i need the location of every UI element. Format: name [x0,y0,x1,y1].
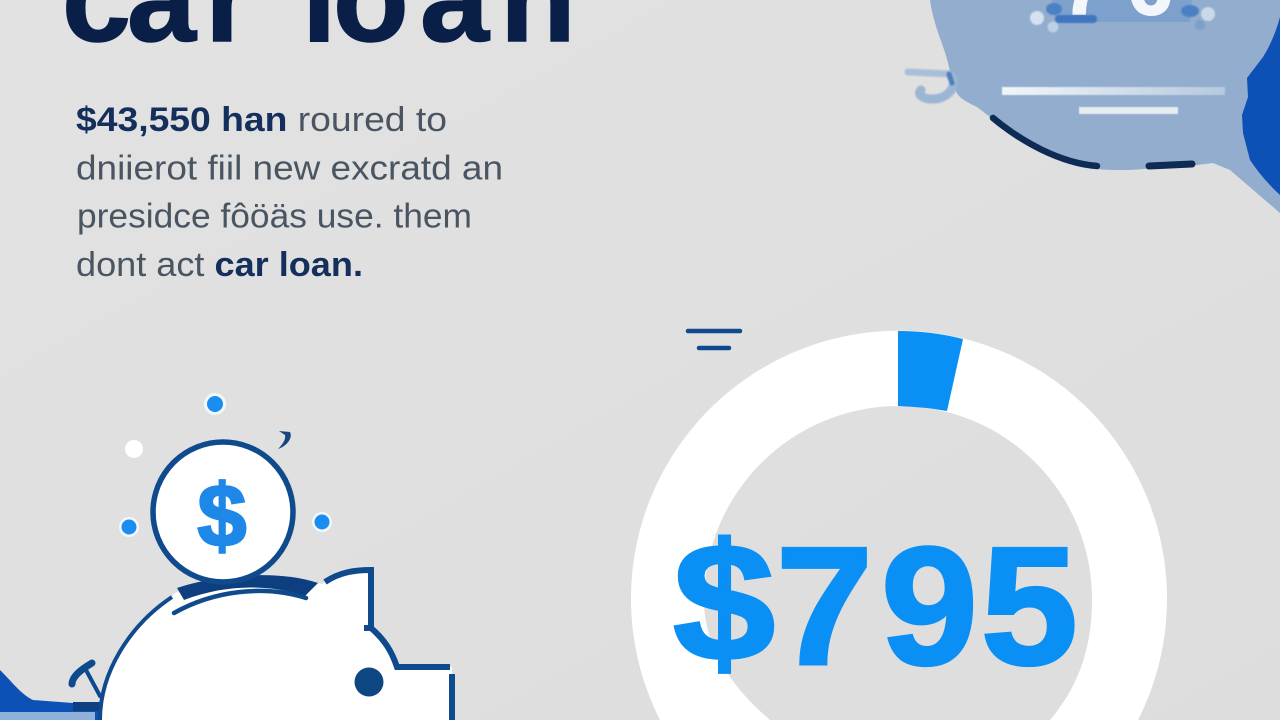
text line 2: dniierot fiil new excratd an [76,150,503,188]
illustration: top right badge [908,0,1280,213]
dark arc segments [993,118,1192,166]
pig eye [354,668,384,696]
big amount [673,510,1078,700]
emblem number [1062,0,1172,31]
digits: 795 [776,513,1078,700]
blue corner shape [1242,17,1280,195]
small accent mark [278,431,291,449]
background wave [0,670,100,720]
pig tail [72,663,100,696]
donut ring [631,331,1167,720]
illustration: piggy bank [0,393,452,720]
coin [153,442,293,582]
emblem ornaments [1030,3,1215,32]
badge blob [930,0,1280,213]
text block: description [76,101,503,284]
text line 1: $43,550 han roured to [76,101,447,139]
donut blue segment [898,331,963,411]
text line 3: presidce fôöäs use. them [77,198,472,236]
pig body [100,570,452,720]
menu lines icon [688,331,740,348]
pig outline [100,570,452,720]
coin slot [174,575,318,613]
currency symbol: $ [673,510,775,696]
emblem base [1052,0,1192,22]
sparkle dots [119,393,332,537]
dollar sign: $ [198,466,246,565]
donut chart [631,331,1167,720]
text line 4: dont act car loan. [76,246,363,284]
curl icon [908,72,954,99]
caption lines [1002,87,1225,114]
